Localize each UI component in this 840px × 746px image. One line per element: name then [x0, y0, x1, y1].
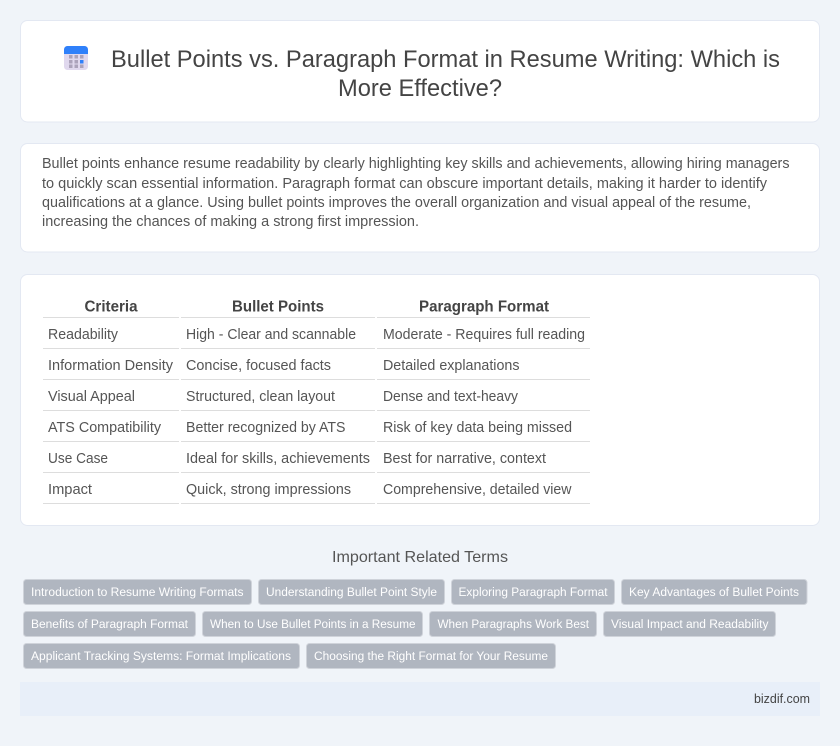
- tag: Understanding Bullet Point Style: [266, 585, 437, 599]
- table header row: Criteria: [84, 298, 138, 316]
- title: Bullet Points vs. Paragraph Format in Resume Writing: Which is: [111, 46, 780, 73]
- table row: impact: Comprehensive, detailed view: [383, 482, 572, 498]
- tag: Introduction to Resume Writing Formats: [31, 585, 244, 599]
- tag: [306, 644, 556, 668]
- tag: Benefits of Paragraph Format: [31, 617, 189, 631]
- tag: Visual Impact and Readability: [611, 617, 769, 631]
- text block: intro paragraph: qualifications at a glance. Using bullet points improves the overall organization and visual appeal of the resume,: [42, 195, 751, 211]
- table row: use case: Ideal for skills, achievements: [186, 451, 370, 467]
- tag: Choosing the Right Format for Your Resume: [314, 649, 548, 663]
- table row: ATS compatibility: ATS Compatibility: [48, 420, 162, 436]
- tag: Exploring Paragraph Format: [458, 585, 608, 599]
- footer source text: bizdif.com: [754, 692, 810, 706]
- table row: visual appeal: Dense and text-heavy: [383, 389, 519, 405]
- table row: information density: Concise, focused facts: [186, 358, 331, 374]
- table row: visual appeal: [43, 389, 590, 411]
- panel: comparison table: [20, 274, 820, 526]
- text block: intro paragraph: increasing the chances of making a strong first impression.: [42, 214, 419, 230]
- table header row: Paragraph Format: [419, 298, 549, 316]
- table row: impact: Quick, strong impressions: [186, 482, 351, 498]
- table row: readability: [43, 327, 590, 349]
- text block: intro paragraph: to quickly scan essential information. Paragraph format can obscure important details, making it harder to identify: [42, 176, 768, 192]
- table row: ATS compatibility: Better recognized by ATS: [186, 420, 346, 436]
- tag: [24, 644, 300, 668]
- text block: intro paragraph: [42, 156, 790, 230]
- tag: [24, 612, 196, 636]
- table row: use case: [43, 451, 590, 473]
- tag: [258, 580, 444, 604]
- icon: calendar: [64, 46, 88, 70]
- panel: title header: [20, 20, 820, 122]
- tag: When Paragraphs Work Best: [438, 617, 590, 631]
- tag: [202, 612, 422, 636]
- table header row: [43, 298, 590, 318]
- table row: ATS compatibility: Risk of key data being missed: [383, 420, 572, 436]
- tag: [24, 580, 252, 604]
- table row: information density: Information Density: [48, 358, 174, 374]
- title: More Effective?: [338, 75, 502, 102]
- footer bar: [20, 682, 820, 716]
- heading: important related terms: Important Related Terms: [332, 549, 508, 566]
- tag: Key Advantages of Bullet Points: [629, 585, 799, 599]
- tag: [604, 612, 776, 636]
- tag: Applicant Tracking Systems: Format Implications: [31, 649, 291, 663]
- table row: use case: Best for narrative, context: [383, 451, 546, 467]
- title: [111, 46, 780, 102]
- table row: readability: Moderate - Requires full reading: [383, 327, 585, 343]
- panel: introduction text: [20, 144, 820, 252]
- table header row: Bullet Points: [232, 298, 324, 316]
- tag: [622, 580, 807, 604]
- table row: information density: [43, 358, 590, 380]
- tag: [430, 612, 596, 636]
- table row: readability: High - Clear and scannable: [186, 327, 356, 343]
- table row: ATS compatibility: [43, 420, 590, 442]
- table row: impact: Impact: [48, 482, 92, 498]
- tag: [452, 580, 614, 604]
- text block: intro paragraph: Bullet points enhance resume readability by clearly highlighting key skills and achievements, allowing hiring managers: [42, 156, 790, 172]
- table row: visual appeal: Structured, clean layout: [186, 389, 335, 405]
- panel: related term tags: [24, 580, 807, 668]
- table row: readability: Readability: [48, 327, 119, 343]
- tag: When to Use Bullet Points in a Resume: [210, 617, 416, 631]
- table row: visual appeal: Visual Appeal: [48, 389, 135, 405]
- table row: impact: [43, 482, 590, 504]
- table row: use case: Use Case: [48, 451, 108, 467]
- table row: information density: Detailed explanations: [383, 358, 520, 374]
